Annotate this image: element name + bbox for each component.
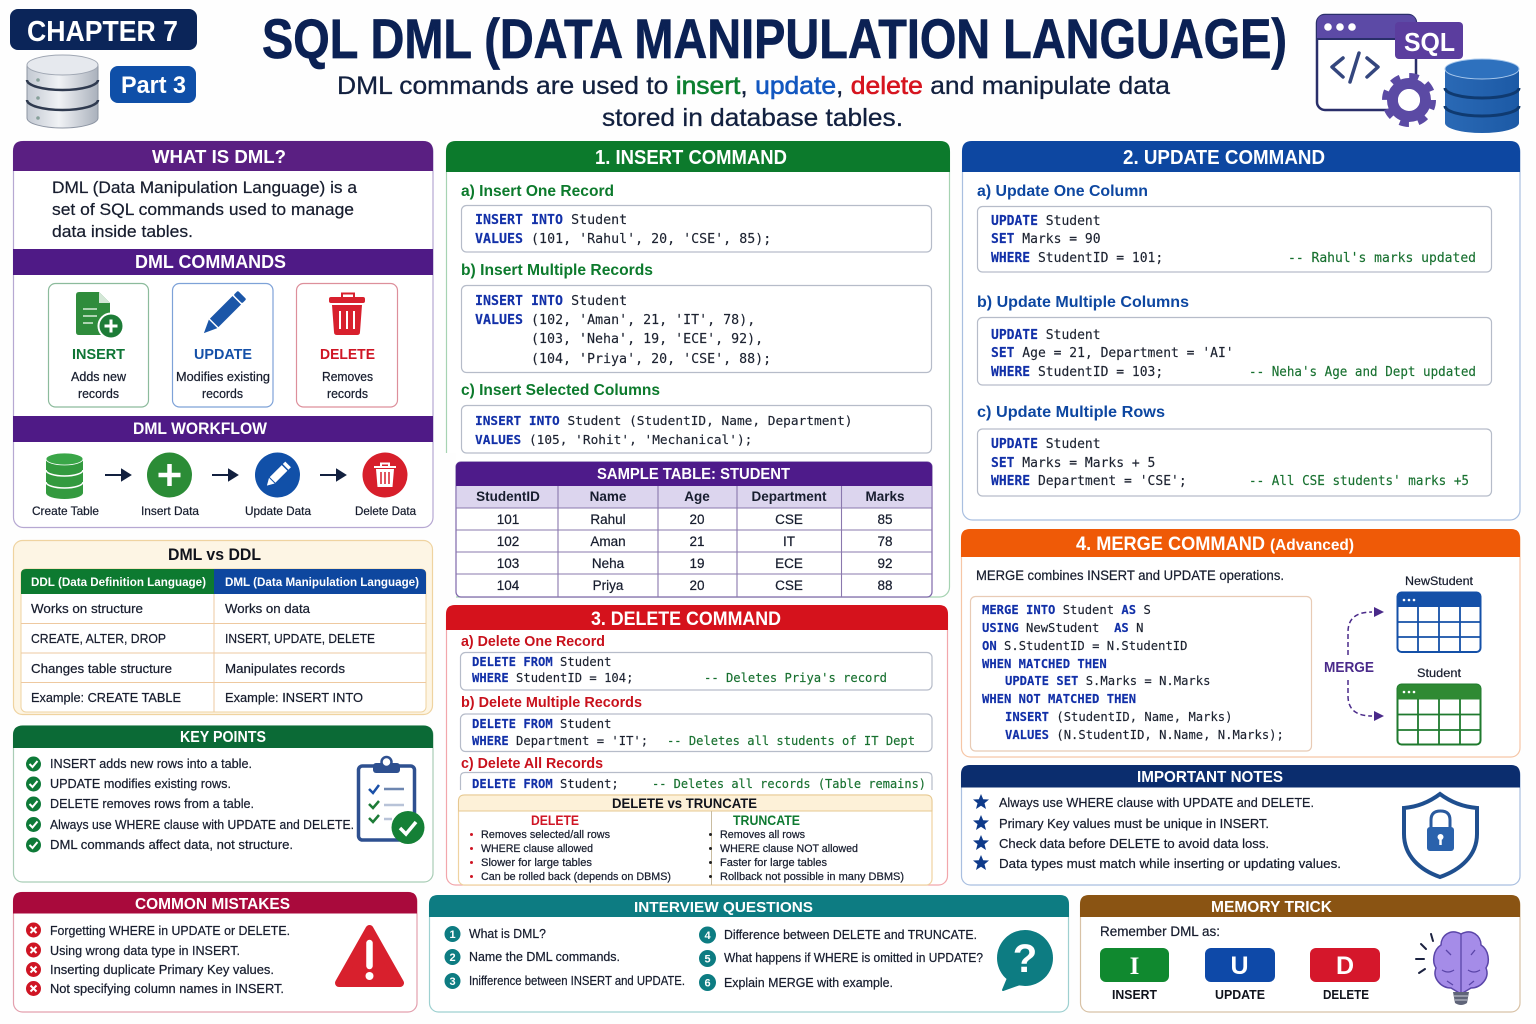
definition text [52,178,358,241]
code block: delete multiple: DELETE FROM Student [472,717,611,731]
code block: insert one: INSERT INTO Student [475,213,627,228]
heading: insert command [446,141,950,172]
heading: important notes [961,765,1520,788]
questions: left column: 1 [449,929,456,941]
subheading a: a) Delete One Record [461,634,605,650]
subheading c: c) Update Multiple Rows [977,404,1165,421]
part badge [110,66,196,103]
code block: update one: WHERE StudentID = 101; [991,251,1163,266]
truncate column: Rollback not possible in many DBMS) [720,871,904,883]
code block: insert multiple [462,286,932,372]
subheading b: b) Delete Multiple Records [461,695,642,711]
key point list: Always use WHERE clause with UPDATE and DELETE. [50,817,354,832]
subheading a: a) Update One Column [977,183,1148,200]
note list: Check data before DELETE to avoid data loss. [999,836,1269,851]
code block: delete multiple: WHERE Department = 'IT'; [472,734,648,748]
arrow [212,470,237,480]
panel: update command [962,141,1520,520]
sample table rows: 78 [877,534,893,549]
table head: DML: DML (Data Manipulation Language) [225,575,419,589]
sample table rows: 19 [689,556,705,571]
code block: update one: UPDATE Student [991,214,1101,229]
delete column: WHERE clause allowed [481,843,593,855]
code block: update multiple rows: WHERE Department = 'CSE'; [991,474,1187,489]
questions: left column: 3 [449,976,456,988]
workflow: update data [245,452,311,518]
icon: document with plus [76,292,124,338]
card: insert [48,284,148,407]
sample table header: Name [590,489,627,504]
code block: insert multiple: VALUES (102, 'Aman', 21, 'IT', 78), [475,313,755,328]
delete column: Slower for large tables [481,857,592,869]
code block: insert one: VALUES (101, 'Rahul', 20, 'CSE', 85); [475,232,771,247]
code block: delete one: DELETE FROM Student [472,655,611,669]
code block: merge: VALUES (N.StudentID, N.Name, N.Marks); [1005,728,1284,742]
heading: DML commands: DML COMMANDS [135,252,286,272]
questions: left column: 2 [449,952,456,964]
subheading b: b) Insert Multiple Records [461,262,653,279]
subtitle: stored in database tables. [602,104,903,132]
truncate column: WHERE clause NOT allowed [720,843,858,855]
workflow: create table [32,453,99,518]
icon: shield with lock [1404,794,1477,877]
mistake list [26,922,290,996]
questions: left column [444,926,685,989]
workflow: delete data [355,452,416,518]
arrow: merge to Student [1348,680,1384,721]
mistake list: Forgetting WHERE in UPDATE or DELETE. [50,923,290,938]
note list: Primary Key values must be unique in INSERT. [999,816,1269,831]
code block: insert columns: INSERT INTO Student (StudentID, Name, Department) [475,414,853,429]
arrow [320,470,345,480]
heading: delete command: 3. DELETE COMMAND [591,609,781,630]
heading: DML workflow: DML WORKFLOW [133,419,268,438]
definition text: set of SQL commands used to manage [52,200,354,219]
card: update [172,284,273,407]
panel: merge command [961,529,1520,757]
code block: update multiple columns [978,318,1492,385]
sample table rows [497,512,893,593]
sample table rows: 20 [689,512,705,527]
code block: delete one: WHERE StudentID = 104; [472,671,633,685]
code block: update multiple columns: SET Age = 21, Department = 'AI' [991,346,1234,361]
sample table rows: 104 [497,578,520,593]
questions: right column: Difference between DELETE and TRUNCATE. [724,928,977,942]
icon: warning triangle [339,929,400,983]
icon: clipboard with check [358,757,424,844]
merge label: MERGE [1324,660,1374,676]
subheading c: c) Insert Selected Columns [461,382,660,399]
table icon: NewStudent: NewStudent [1405,574,1474,588]
subheading c: c) Delete All Records [461,756,603,772]
code block: update multiple rows: -- All CSE students' marks +5 [1249,474,1469,489]
heading: what is DML [13,141,433,171]
code block: merge: WHEN NOT MATCHED THEN [982,692,1136,706]
card: delete [296,284,398,407]
code block: insert multiple: (104, 'Priya', 20, 'CSE', 88); [531,352,771,367]
mistake list: Using wrong data type in INSERT. [50,943,240,958]
code block: update one: -- Rahul's marks updated [1288,251,1476,266]
comparison: delete vs truncate: DELETE vs TRUNCATE [612,795,757,811]
sample table rows: Priya [593,578,624,593]
code block: delete all: DELETE FROM Student; [472,777,619,791]
card: delete: records [327,387,368,401]
heading: merge command: (Advanced) [1270,537,1354,554]
panel: insert command [444,141,950,599]
panel: memory trick [1080,895,1520,1012]
sample table title: SAMPLE TABLE: STUDENT [597,466,790,483]
sample table rows: 88 [877,578,893,593]
delete column: Can be rolled back (depends on DBMS) [481,871,671,883]
truncate column: Removes all rows [720,829,805,841]
code block: update multiple rows: UPDATE Student [991,437,1101,452]
note list: Data types must match while inserting or updating values. [999,856,1341,871]
workflow: insert data [141,452,199,518]
code block: update multiple columns: UPDATE Student [991,328,1101,343]
code block: insert columns: VALUES (105, 'Rohit', 'Mechanical'); [475,433,752,448]
code block: merge: UPDATE SET S.Marks = N.Marks [1005,674,1210,688]
table head: DDL [21,569,214,594]
questions: left column: Name the DML commands. [469,950,620,964]
definition text: data inside tables. [52,222,193,241]
delete column: Removes selected/all rows [481,829,610,841]
sample table rows: Neha [592,556,625,571]
sample table rows: 103 [497,556,519,571]
letter: D delete [1310,948,1380,1002]
code block: delete one [460,652,932,690]
icon: trash can [329,294,365,335]
sample table [456,462,932,597]
table rows: Example: INSERT INTO [225,690,363,705]
heading: interview questions [429,895,1069,917]
letter: D delete: DELETE [1323,988,1369,1002]
card: insert: INSERT [72,346,125,363]
arrow [105,470,130,480]
letter: U update [1205,948,1275,1002]
heading: merge command: 4. MERGE COMMAND [1076,534,1265,555]
icon: SQL window, gear and database [1317,15,1519,133]
card: update: Modifies existing [176,370,270,384]
letter: U update: U [1230,952,1249,980]
table icon: Student [1398,666,1480,745]
code block: merge [970,596,1312,751]
heading: what is DML: WHAT IS DML? [152,146,286,167]
table rows [31,601,375,705]
code block: delete multiple [460,714,932,752]
icon: SQL window, gear and database: SQL [1404,27,1455,57]
sample table header: Department [751,489,827,504]
mistake list: Not specifying column names in INSERT. [50,981,284,996]
heading: common mistakes: COMMON MISTAKES [135,896,290,913]
card: update: records [202,387,243,401]
card: insert: records [78,387,119,401]
sample table rows: IT [783,534,795,549]
table rows: Example: CREATE TABLE [31,690,181,705]
card: delete: DELETE [320,346,375,363]
heading: insert command: 1. INSERT COMMAND [595,147,787,169]
table rows: Manipulates records [225,661,346,676]
heading: interview questions: INTERVIEW QUESTIONS [634,899,813,916]
workflow: insert data: Insert Data [141,504,199,518]
sample table rows: CSE [775,512,803,527]
sample table rows: 85 [877,512,893,527]
panel: key points [13,726,433,882]
panel: common mistakes [13,892,417,1012]
letter: I insert: I [1130,953,1139,980]
memory intro: Remember DML as: [1100,924,1220,939]
card: insert: Adds new [71,370,127,384]
note list [973,794,1341,871]
sample table header: Age [684,489,710,504]
heading: memory trick: MEMORY TRICK [1211,899,1333,916]
chapter badge [10,9,197,50]
code block: delete all: -- Deletes all records (Table remains) [652,777,926,791]
subheading a: a) Insert One Record [461,183,614,200]
workflow: create table: Create Table [32,504,99,518]
truncate column: TRUNCATE [733,813,800,828]
heading: key points [13,726,433,748]
subtitle [337,72,1170,132]
code block: delete multiple: -- Deletes all students of IT Dept [667,734,915,748]
code block: update multiple columns: -- Neha's Age and Dept updated [1249,365,1476,380]
part badge: Part 3 [121,72,186,99]
chapter badge: CHAPTER 7 [27,16,178,48]
heading: DML commands [13,249,433,275]
heading: DML vs DDL: DML vs DDL [168,546,261,564]
sample table rows: 101 [497,512,519,527]
sample table title [456,462,932,486]
heading: merge command [961,529,1520,557]
code block: update multiple rows [978,429,1492,496]
code block: delete one: -- Deletes Priya's record [704,671,887,685]
heading: update command [962,141,1520,172]
subheading b: b) Update Multiple Columns [977,294,1189,311]
letter: D delete: D [1336,952,1354,980]
questions: right column: What happens if WHERE is omitted in UPDATE? [724,951,983,965]
code block: insert columns [462,406,932,453]
panel: DML vs DDL [14,540,432,714]
heading: common mistakes [13,892,417,914]
workflow: update data: Update Data [245,504,311,518]
sample table header: Marks [865,489,905,504]
card: update: UPDATE [194,346,252,363]
panel: interview questions [429,895,1069,1012]
questions: right column: 6 [704,978,711,990]
mistake list: Inserting duplicate Primary Key values. [50,962,274,977]
table icon: Student: Student [1417,666,1462,680]
table rows: CREATE, ALTER, DROP [31,631,166,646]
code block: insert multiple: INSERT INTO Student [475,294,627,309]
code block: update multiple columns: WHERE StudentID = 103; [991,365,1163,380]
panel: important notes [961,765,1520,885]
sample table rows: Aman [590,534,626,549]
code block: merge: USING NewStudent AS N [982,621,1143,635]
sample table rows: Rahul [590,512,626,527]
table rows: INSERT, UPDATE, DELETE [225,631,375,646]
delete column [470,813,671,883]
key point list: DELETE removes rows from a table. [50,796,254,811]
questions: right column: 4 [704,930,711,942]
code block: delete all [460,772,932,791]
questions: right column [699,926,983,991]
icon: silver database [27,55,98,128]
code block: merge: WHEN MATCHED THEN [982,657,1107,671]
heading: memory trick [1080,895,1520,917]
code block: merge: MERGE INTO Student AS S [982,603,1151,617]
heading: update command: 2. UPDATE COMMAND [1123,147,1325,169]
arrow: merge to NewStudent [1348,607,1384,655]
panel: delete command [446,605,948,885]
key point list: INSERT adds new rows into a table. [50,756,252,771]
card: delete: Removes [322,370,373,384]
subtitle: DML commands are used to insert, update, delete and manipulate data [337,72,1170,100]
comparison: delete vs truncate [458,795,932,885]
table head: DML [214,569,426,594]
code block: merge: ON S.StudentID = N.StudentID [982,639,1187,653]
questions: right column: 5 [704,954,711,966]
letter: I insert: INSERT [1112,988,1157,1002]
icon: question bubble: ? [1013,937,1037,981]
sample table header: StudentID [476,489,540,504]
letter: I insert [1100,948,1169,1002]
truncate column: Faster for large tables [720,857,827,869]
sample table rows: 92 [877,556,893,571]
panel: what is DML [13,141,433,528]
definition text: DML (Data Manipulation Language) is a [52,178,358,197]
sample table rows: 102 [497,534,519,549]
code block: update one [978,206,1492,272]
icon: question bubble [997,930,1053,990]
code block: update multiple rows: SET Marks = Marks + 5 [991,456,1155,471]
key point list [26,756,354,852]
heading: important notes: IMPORTANT NOTES [1137,769,1283,786]
note list: Always use WHERE clause with UPDATE and DELETE. [999,795,1314,810]
heading: key points: KEY POINTS [180,729,266,746]
code block: update one: SET Marks = 90 [991,232,1101,247]
key point list: UPDATE modifies existing rows. [50,776,231,791]
delete column: DELETE [531,813,579,828]
code block: merge: INSERT (StudentID, Name, Marks) [1005,710,1232,724]
icon: pencil [200,291,246,337]
questions: right column: Explain MERGE with example. [724,976,893,990]
workflow: delete data: Delete Data [355,504,416,518]
truncate column [709,813,904,883]
code block: insert one [462,206,932,252]
heading: delete command [446,605,948,630]
sample table rows: 21 [689,534,705,549]
merge description: MERGE combines INSERT and UPDATE operations. [976,568,1284,583]
table rows: Changes table structure [31,661,172,676]
questions: left column: What is DML? [469,927,546,941]
key point list: DML commands affect data, not structure. [50,837,293,852]
letter: U update: UPDATE [1215,988,1265,1002]
sample table rows: 20 [689,578,705,593]
sample table header [456,486,932,508]
table head: DDL: DDL (Data Definition Language) [31,575,206,589]
table rows: Works on structure [31,601,143,616]
icon: brain bulb [1416,932,1488,1005]
code block: insert multiple: (103, 'Neha', 19, 'ECE', 92), [531,332,763,347]
sample table rows: ECE [775,556,803,571]
questions: left column: Inifference between INSERT and UPDATE. [469,974,685,988]
table rows: Works on data [225,601,311,616]
heading: DML workflow [13,416,433,442]
table icon: NewStudent [1398,574,1480,652]
title: SQL DML (DATA MANIPULATION LANGUAGE) [262,7,1287,70]
sample table rows: CSE [775,578,803,593]
